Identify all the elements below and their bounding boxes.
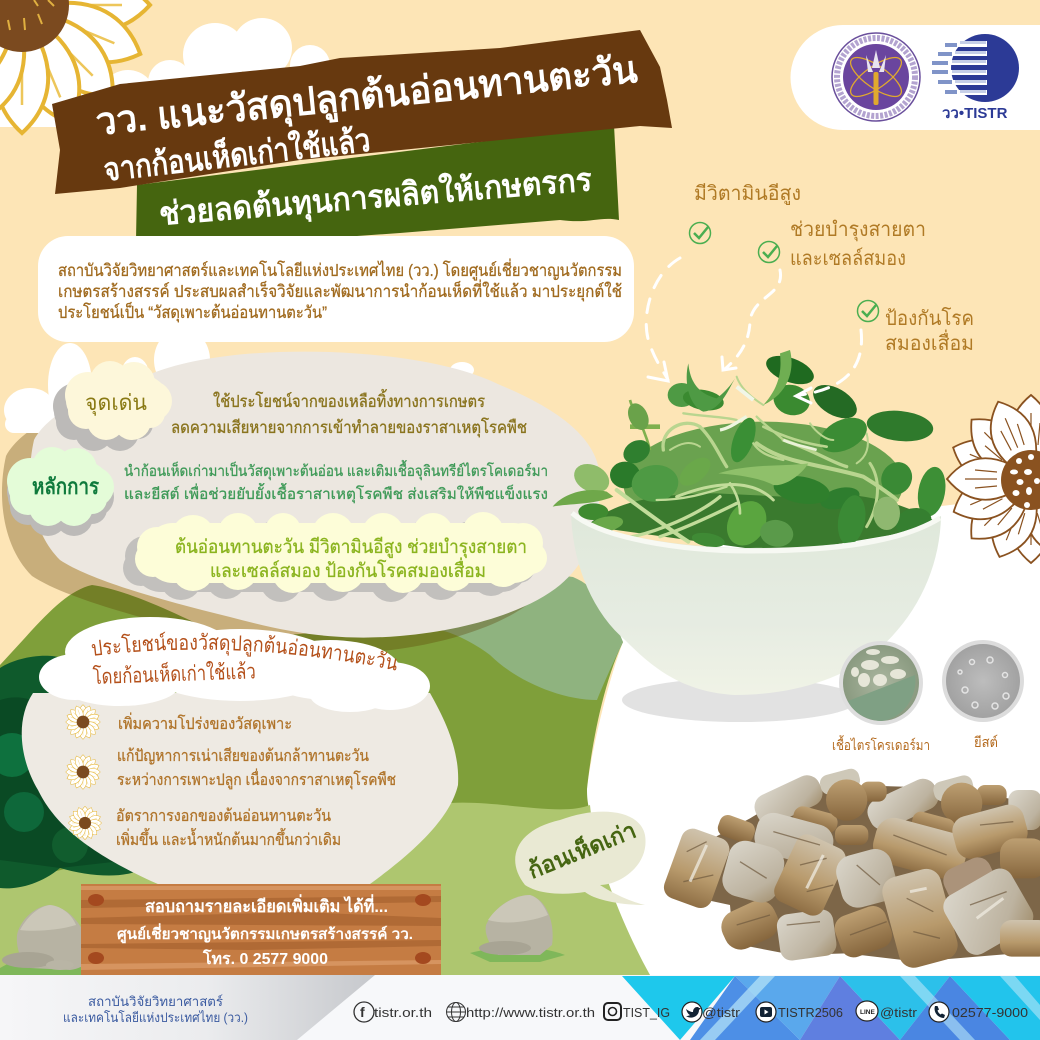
benefit 2 (117, 747, 396, 790)
callout: vitamin cloud (123, 512, 547, 602)
arrows (646, 258, 862, 403)
principle text: และยีสต์ เพื่อช่วยยับยั้งเชื้อราสาเหตุโรคพืช ส่งเสริมให้พืชแข็งแรง (124, 483, 548, 504)
heading cloud (39, 617, 430, 712)
benefit label: dementia (885, 307, 974, 355)
intro panel: ประโยชน์เป็น “วัสดุเพาะต้นอ่อนทานตะวัน” (58, 301, 327, 323)
phone: 02577-9000 (952, 1005, 1028, 1020)
logo: ministry seal (832, 33, 920, 121)
right sunflower (945, 394, 1040, 565)
heading cloud: ประโยชน์ของวัสดุปลูกต้นอ่อนทานตะวัน (92, 632, 396, 670)
facebook (354, 1002, 432, 1022)
benefit label: vitamin E: มีวิตามินอีสูง (694, 183, 801, 206)
brown banner: วว. แนะวัสดุปลูกต้นอ่อนทานตะวัน (94, 49, 639, 146)
youtube: TISTR2506 (778, 1005, 843, 1020)
organisation name: และเทคโนโลยีแห่งประเทศไทย (วว.) (63, 1010, 248, 1025)
benefit label: dementia: สมองเสื่อม (885, 329, 974, 355)
arrow 3 (796, 330, 862, 403)
white clouds behind panel (4, 328, 474, 433)
icon: sunflower bullet 3 (68, 806, 102, 840)
rock right (470, 895, 565, 962)
line (856, 1001, 918, 1021)
organisation name (63, 994, 248, 1025)
bowl (571, 512, 941, 695)
green banner: ช่วยลดต้นทุนการผลิตให้เกษตรกร (158, 160, 593, 235)
highlight text: ใช้ประโยชน์จากของเหลือทิ้งทางการเกษตร (213, 389, 485, 411)
bowl shadow (622, 678, 858, 722)
petri dish: yeast (942, 640, 1024, 750)
brown banner: จากก้อนเห็ดเก่าใช้แล้ว (101, 120, 372, 188)
benefit 3: อัตราการงอกของต้นอ่อนทานตะวัน (116, 807, 331, 825)
panel: benefits (22, 617, 458, 884)
highlight text: ลดความเสียหายจากการเข้าทำลายของราสาเหตุโรคพืช (171, 417, 527, 438)
heading cloud: โดยก้อนเห็ดเก่าใช้แล้ว (92, 657, 256, 689)
white clouds behind title (0, 0, 330, 127)
website (446, 1002, 595, 1022)
intro panel (38, 236, 634, 342)
social links (354, 1001, 1028, 1022)
olive hill (0, 585, 623, 895)
intro panel: สถาบันวิจัยวิทยาศาสตร์และเทคโนโลยีแห่งประเทศไทย (วว.) โดยศูนย์เชี่ยวชาญนวัตกรรม (58, 258, 622, 281)
benefit label: dementia: ป้องกันโรค (885, 307, 974, 330)
badge: highlights: จุดเด่น (85, 390, 147, 416)
sage hill (440, 576, 623, 700)
organisation name: สถาบันวิจัยวิทยาศาสตร์ (88, 994, 223, 1009)
icon: sunflower bullet 2 (66, 755, 100, 789)
instagram (604, 1003, 670, 1020)
line: @tistr (880, 1005, 918, 1020)
highlight text (171, 389, 527, 438)
panel: highlights and principles (7, 352, 600, 638)
intro panel: เกษตรสร้างสรรค์ ประสบผลสำเร็จวิจัยและพัฒนาการนำก้อนเห็ดที่ใช้แล้ว มาประยุกต์ใช้ (58, 279, 622, 302)
brown banner (52, 30, 672, 194)
website: http://www.tistr.or.th (466, 1005, 595, 1020)
principle text (124, 460, 548, 504)
logo pill (791, 25, 1040, 130)
sign text: โทร. 0 2577 9000 (202, 948, 328, 968)
icon: check 3 (858, 300, 878, 322)
benefit label: eyes and brain cells: และเซลล์สมอง (790, 247, 906, 270)
facebook: tistr.or.th (374, 1005, 432, 1020)
mushroom blocks (661, 767, 1040, 971)
sunflower top-left (0, 0, 150, 133)
footer (0, 975, 1040, 1040)
sprouts (553, 350, 949, 553)
callout: vitamin cloud: และเซลล์สมอง ป้องกันโรคสมองเสื่อม (210, 557, 486, 582)
title banners (52, 30, 672, 254)
benefit label: eyes and brain cells: ช่วยบำรุงสายตา (790, 219, 926, 242)
badge: principle: หลักการ (32, 474, 99, 499)
youtube (756, 1002, 843, 1022)
sign text: สอบถามรายละเอียดเพิ่มเติม ได้ที่... (145, 894, 388, 916)
label: ยีสต์ (974, 734, 998, 750)
logo: TISTR: วว•TISTR (942, 105, 1008, 122)
facebook: f (360, 1004, 365, 1020)
green banner (136, 125, 619, 254)
logo: TISTR (932, 34, 1019, 122)
phone (929, 1002, 1028, 1022)
line: LINE (860, 1009, 875, 1016)
benefit 3: เพิ่มขึ้น และน้ำหนักต้นมากขึ้นกว่าเดิม (116, 828, 341, 849)
arrow 1 (646, 258, 680, 381)
tree (0, 656, 154, 888)
label: เชื้อไตรโครเดอร์มา (832, 735, 930, 753)
instagram: TIST_IG (623, 1005, 670, 1020)
speech bubble: old mushroom blocks: ก้อนเห็ดเก่า (523, 815, 640, 884)
light green ground (0, 803, 650, 975)
icon: sunflower bullet 1 (66, 705, 100, 739)
benefit label: eyes and brain cells (790, 219, 926, 270)
badge: highlights (53, 361, 172, 451)
petri dish: trichoderma (832, 641, 930, 753)
icon: check 1 (690, 222, 710, 244)
speech bubble: old mushroom blocks (515, 812, 646, 905)
sign text (117, 894, 413, 968)
big bubble shadow (2, 368, 572, 654)
white lower-right area (586, 495, 1040, 975)
footer pattern (622, 976, 1040, 1040)
badge: principle (7, 447, 114, 536)
twitter (682, 1002, 741, 1022)
icon: check 2 (758, 242, 780, 262)
benefit 2: แก้ปัญหาการเน่าเสียของต้นกล้าทานตะวัน (117, 747, 369, 765)
rock left (0, 905, 103, 975)
twitter: @tistr (702, 1005, 741, 1020)
callout list: benefits of sprouts (690, 183, 974, 355)
sign text: ศูนย์เชี่ยวชาญนวัตกรรมเกษตรสร้างสรรค์ วว. (117, 923, 413, 944)
callout: vitamin cloud: ต้นอ่อนทานตะวัน มีวิตามินอีสูง ช่วยบำรุงสายตา (175, 536, 527, 559)
benefit 2: ระหว่างการเพาะปลูก เนื่องจากราสาเหตุโรคพืช (117, 768, 396, 790)
arrow 2 (722, 270, 781, 370)
benefit 1: เพิ่มความโปร่งของวัสดุเพาะ (118, 712, 292, 734)
principle text: นำก้อนเห็ดเก่ามาเป็นวัสดุเพาะต้นอ่อน และเติมเชื้อจุลินทรีย์ไตรโคเดอร์มา (124, 460, 548, 481)
wooden sign (81, 884, 441, 975)
hills (0, 576, 650, 975)
benefit 3 (116, 807, 341, 849)
